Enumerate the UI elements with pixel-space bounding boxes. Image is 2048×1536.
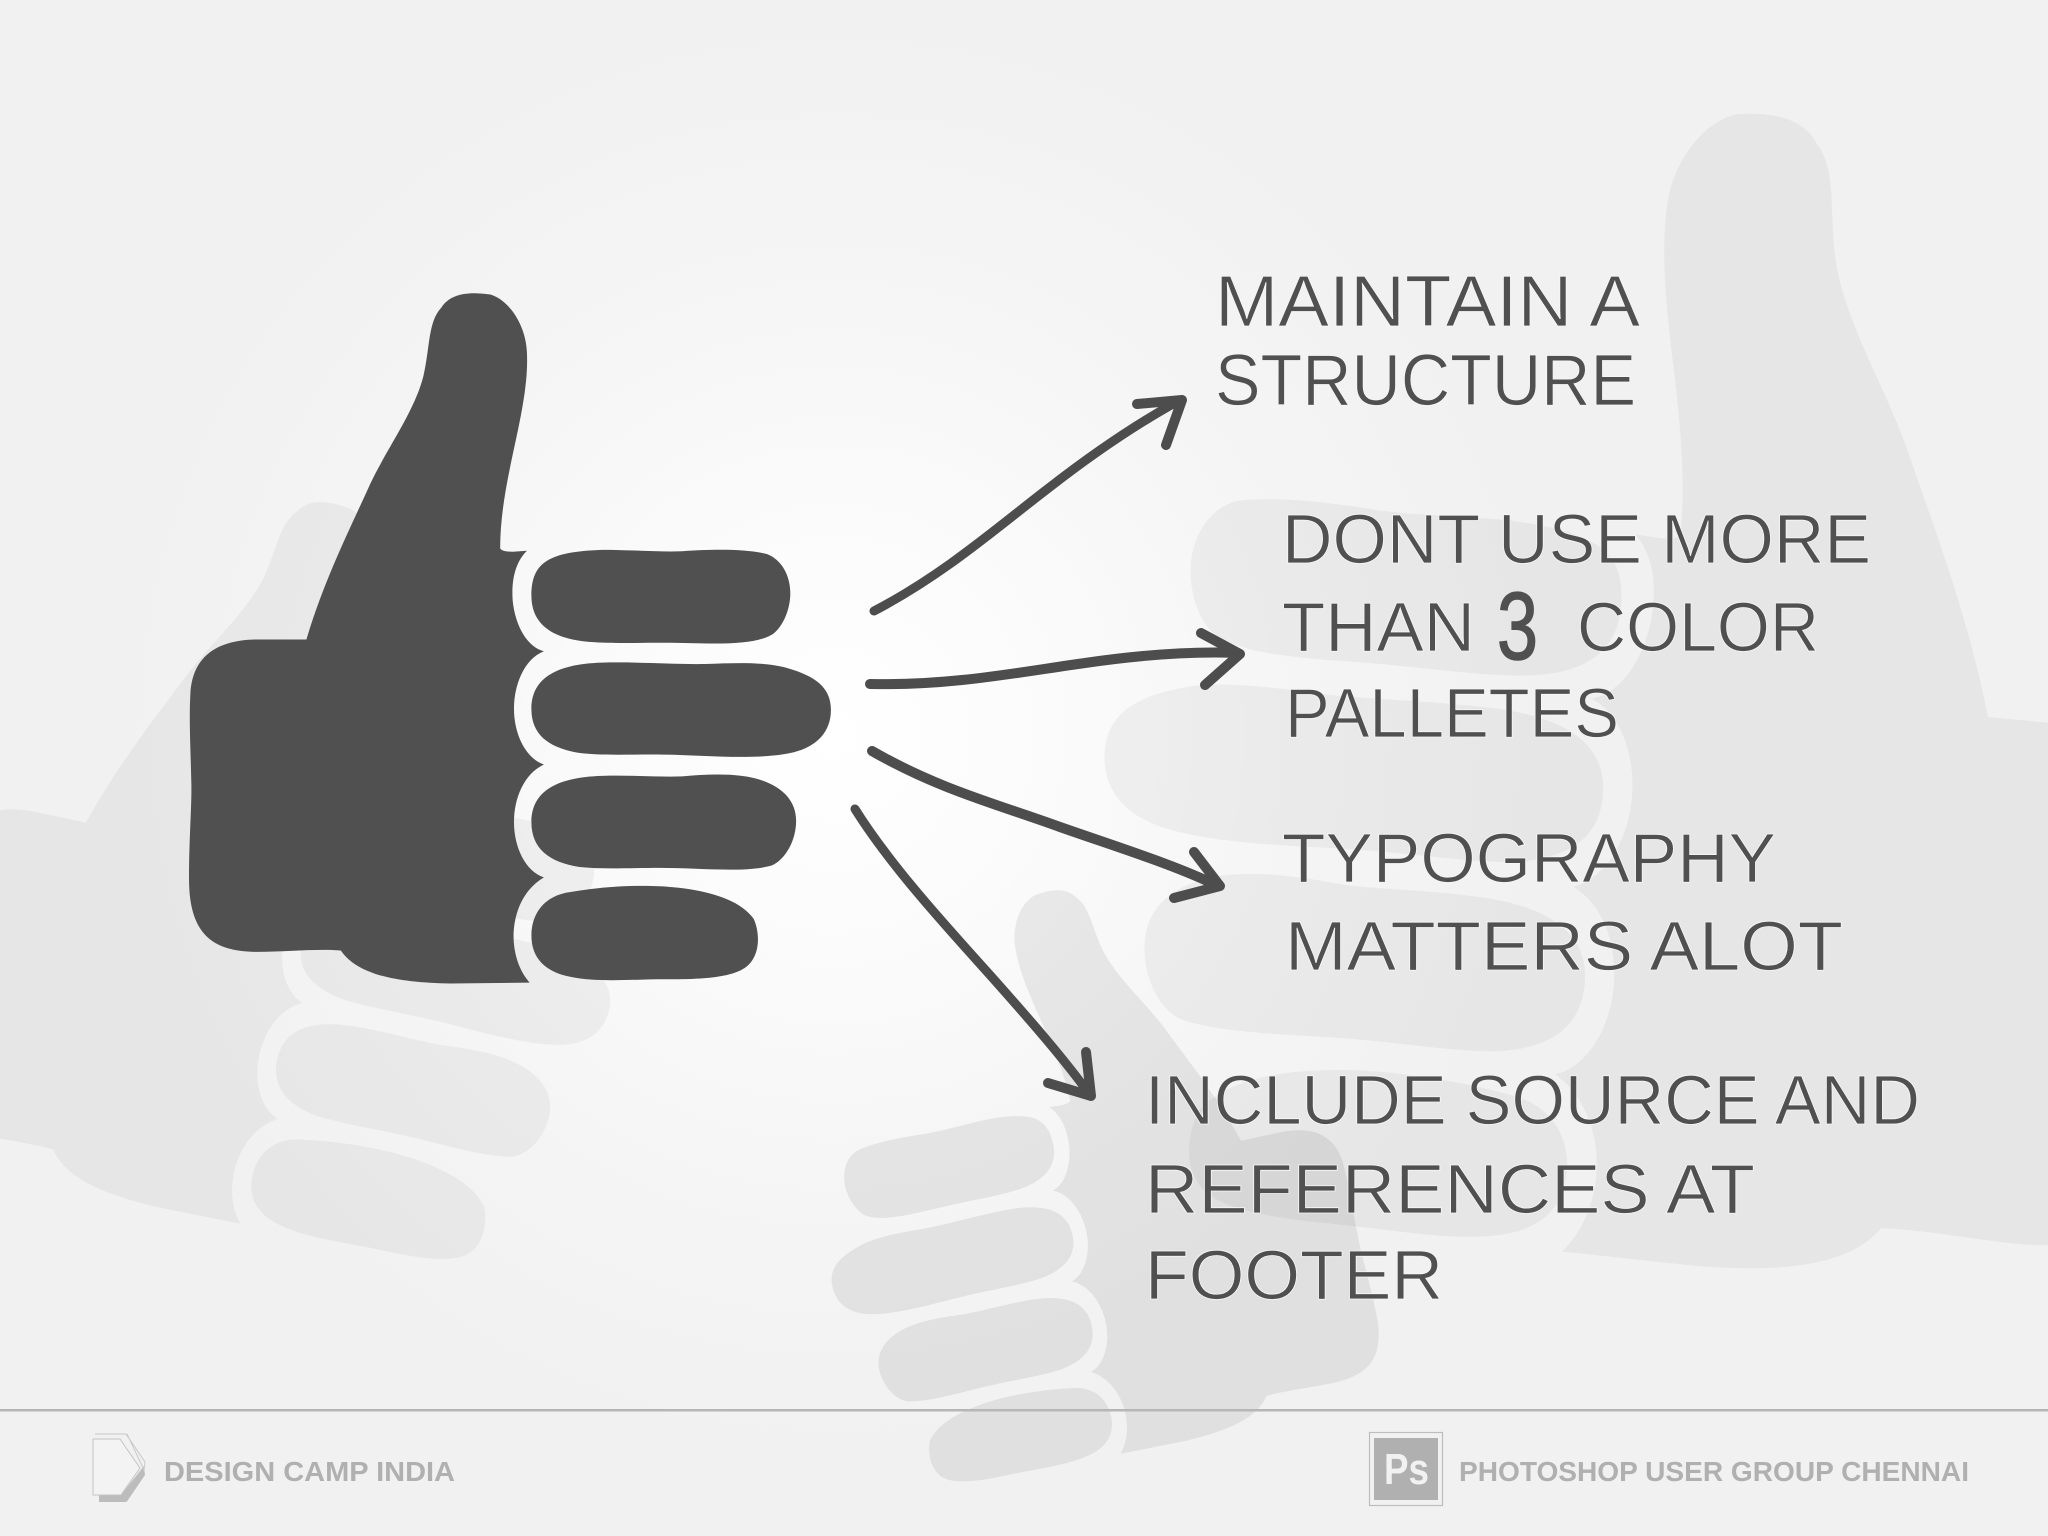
text: dont use more than 3 color palletes: THAN [1282,588,1475,666]
text: dont use more than 3 color palletes: COLOR [1577,588,1819,666]
background thumb: left [0,441,700,1290]
text: dont use more than 3 color palletes: DONT USE MORE [1282,500,1871,578]
icon: photoshop logo [1370,1432,1442,1506]
text: typography matters alot: MATTERS ALOT [1285,907,1843,985]
arrow: to typography [872,751,1220,898]
text: include source and references at footer: FOOTER [1145,1236,1443,1314]
footer divider [0,1409,2048,1412]
text: typography matters alot: TYPOGRAPHY [1282,819,1776,897]
text: include source and references at footer: INCLUDE SOURCE AND [1145,1061,1920,1139]
text: include source and references at footer: REFERENCES AT [1145,1150,1755,1228]
text: maintain a structure: MAINTAIN A [1215,262,1640,342]
text: dont use more than 3 color palletes: 3 [1497,573,1538,680]
arrow: to maintain a structure [874,400,1182,611]
text: photoshop user group chennai: PHOTOSHOP USER GROUP CHENNAI [1459,1456,1969,1487]
background thumb: right large [1061,57,2048,1308]
text: typography matters alot [1282,819,1843,985]
arrow: to colour palettes [870,633,1240,685]
icon: design camp india logo [93,1434,145,1502]
text: dont use more than 3 color palletes [1282,500,1871,752]
text: maintain a structure [1215,262,1640,421]
text: include source and references at footer [1145,1061,1920,1314]
text: dont use more than 3 color palletes: PALLETES [1285,674,1619,752]
arrow: to source and references [855,809,1091,1096]
main thumbs-up icon [189,293,831,984]
background thumb: small lower centre [761,843,1394,1506]
text: design camp india: DESIGN CAMP INDIA [164,1456,455,1487]
icon: photoshop logo: Ps [1384,1445,1429,1494]
text: maintain a structure: STRUCTURE [1215,341,1636,421]
